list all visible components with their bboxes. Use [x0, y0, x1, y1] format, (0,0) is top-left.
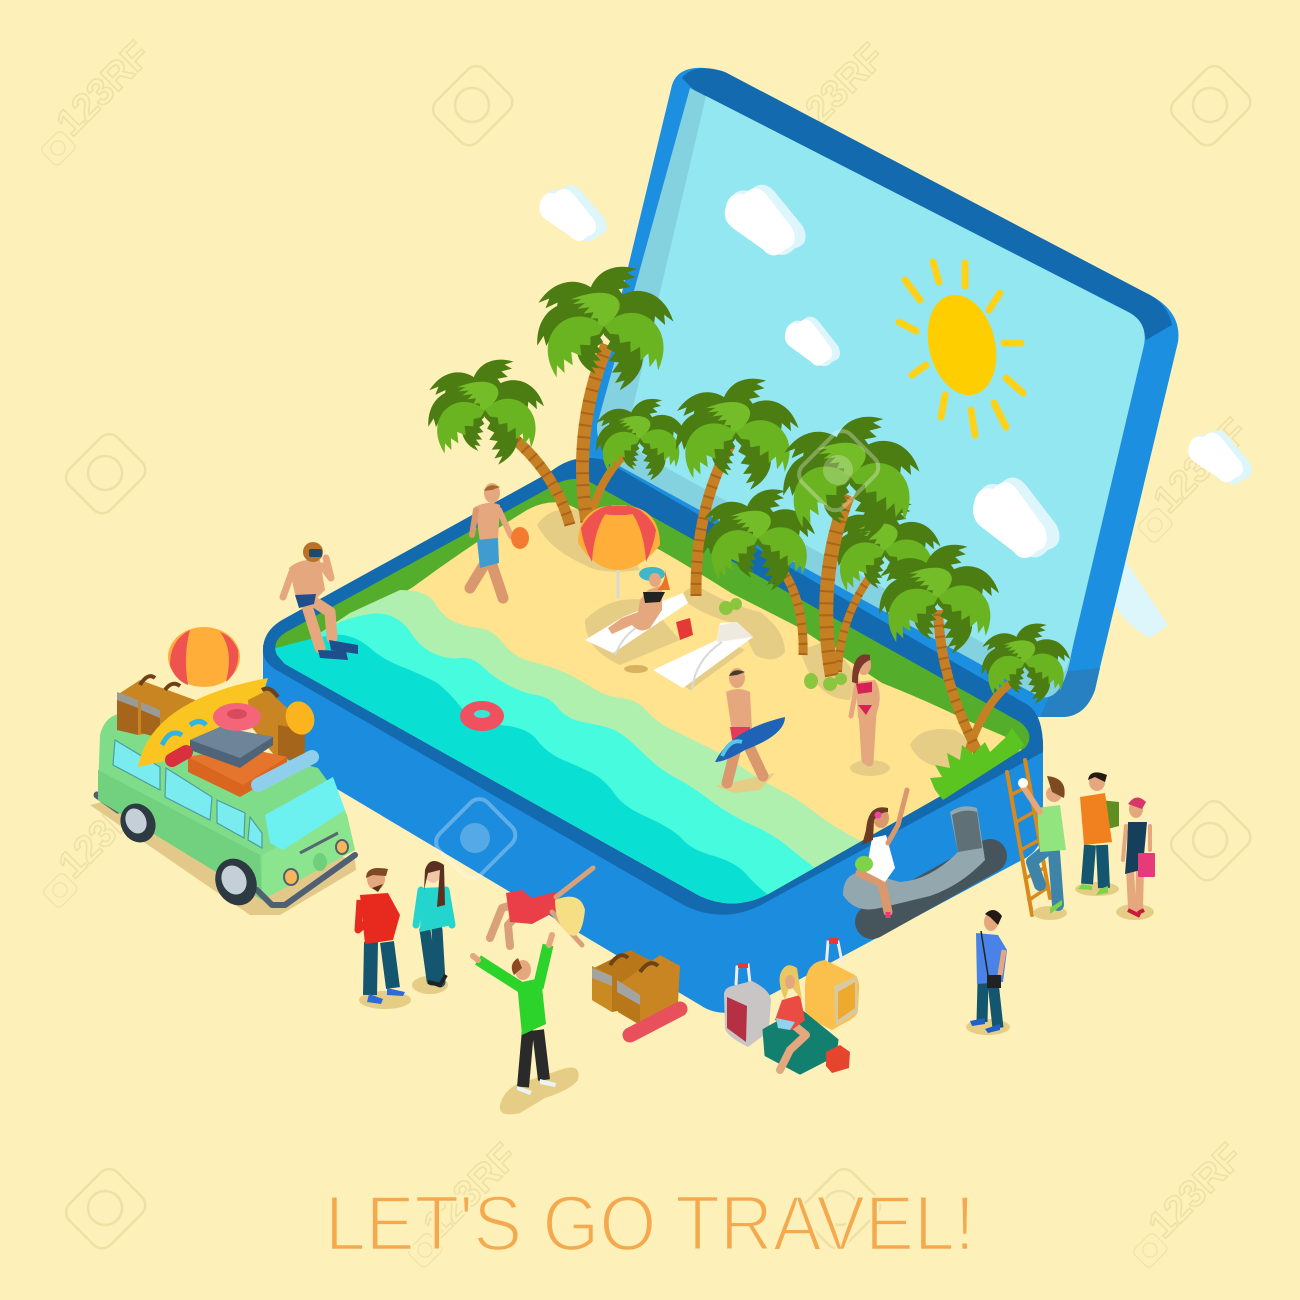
palm 1 [426, 354, 570, 525]
base rim [263, 458, 1043, 915]
palm 7 [829, 497, 941, 672]
roof umbrella [168, 627, 240, 687]
man with backpack [1075, 772, 1119, 896]
roof stacked luggage [188, 727, 287, 797]
handle [843, 806, 990, 922]
suitcase lid [588, 68, 1178, 717]
woman in teal sweater [412, 861, 452, 994]
lid top dark band [682, 68, 1172, 340]
woman with pink bag [1116, 797, 1155, 920]
rear bumper [97, 795, 118, 810]
deep water [270, 635, 775, 915]
lid shell [588, 68, 1178, 717]
sky shade [597, 88, 1145, 697]
roof suitcases right [248, 689, 305, 760]
clouds behind lid [539, 185, 1252, 638]
red suitcase [724, 963, 771, 1047]
turquoise water [275, 614, 832, 910]
yellow suitcase [805, 938, 859, 1030]
ball player [470, 483, 529, 598]
lounger left [585, 593, 688, 655]
swim ring [460, 701, 504, 731]
bikini woman [850, 654, 890, 776]
red beach bag [676, 618, 693, 640]
base side [263, 645, 1043, 1013]
watermarks: 123RF [51, 776, 161, 886]
palm 4 [673, 373, 799, 596]
stacked brown suitcases [592, 950, 680, 1025]
van front face [262, 810, 355, 900]
side watermark [431, 794, 520, 883]
lid lower corner shade [1040, 668, 1100, 717]
palm 9 [968, 619, 1071, 752]
sand [408, 502, 1022, 904]
beach hat [281, 697, 319, 739]
palm 5 [701, 484, 816, 655]
suitcase base [263, 458, 1043, 1013]
man with shoulder bag [966, 910, 1010, 1035]
seated blonde woman [775, 965, 806, 1070]
lounger right [653, 622, 753, 690]
sunbathing woman [608, 566, 670, 634]
surfboard [138, 678, 268, 767]
van shadow [90, 800, 356, 915]
palm 8 [877, 539, 1000, 752]
beach umbrella [578, 505, 660, 598]
man in red sweater [358, 868, 411, 1009]
roof red roll [172, 752, 186, 760]
surfboard waves [162, 722, 206, 745]
sand shadows [537, 509, 985, 793]
roof pink ring [213, 703, 261, 731]
sky [629, 96, 1145, 680]
flip flops [624, 665, 648, 673]
van lower side [98, 770, 262, 900]
surfer [715, 668, 785, 783]
shallow water [280, 590, 868, 910]
roof suitcases left [117, 676, 195, 738]
climbing man [1018, 776, 1067, 920]
snorkeler [283, 542, 358, 660]
watermarks: 123RF [1141, 1136, 1251, 1246]
van front [257, 833, 355, 905]
van body [98, 714, 355, 900]
watermarks: 123RF [783, 36, 893, 146]
windshield [265, 777, 345, 850]
title: LET'S GO TRAVEL! [325, 1179, 975, 1267]
bush [930, 728, 1024, 800]
palm 6 [780, 410, 920, 676]
watermarks: 123RF [1146, 411, 1256, 521]
palm trees [426, 260, 1071, 752]
sky clouds [725, 185, 1060, 558]
camper van [90, 627, 356, 915]
ladder [1007, 760, 1050, 915]
flying woman [490, 868, 593, 946]
van wheels [114, 798, 264, 912]
palm 2 [534, 260, 674, 522]
roof blue mat [258, 757, 312, 785]
red rolled mat [630, 1009, 680, 1035]
coconuts [719, 598, 847, 691]
grass border [275, 479, 1029, 903]
watermarks: 123RF [49, 34, 159, 144]
palm watermark [794, 426, 883, 515]
watermarks: 123RF [416, 1136, 526, 1246]
van windows [113, 740, 262, 848]
beach surface [270, 502, 1030, 915]
palm 3 [591, 394, 686, 518]
sun [899, 262, 1023, 435]
green shirt man [473, 935, 579, 1114]
woman on handle [855, 790, 907, 918]
teal suitcase [764, 1010, 837, 1073]
small red bag [826, 1045, 850, 1073]
